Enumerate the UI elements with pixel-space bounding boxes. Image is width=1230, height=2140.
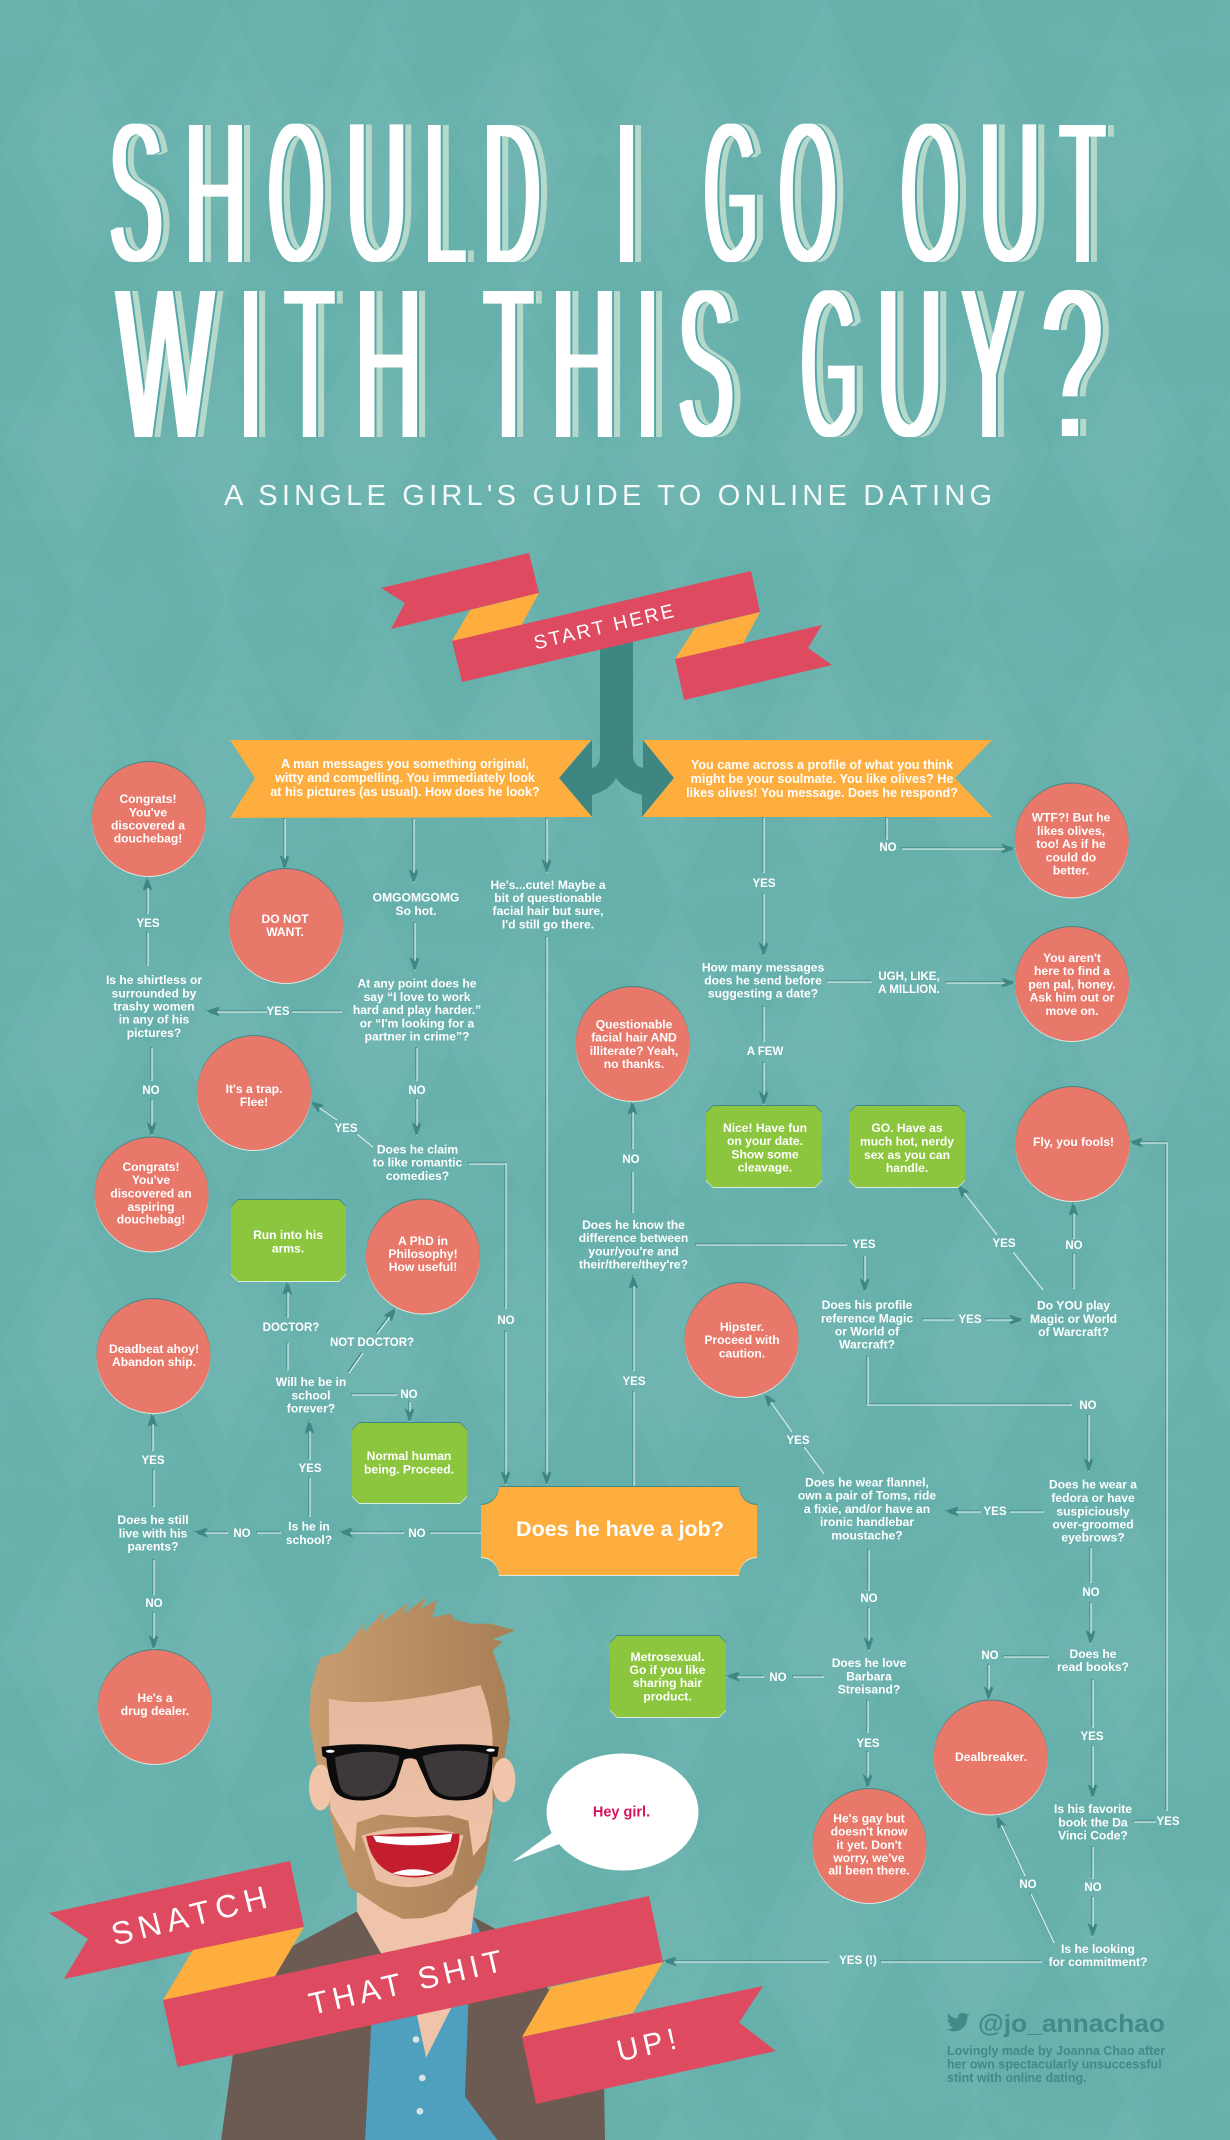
- arrow: da vinci no: [1092, 1847, 1094, 1937]
- arrow: magic no: [868, 1357, 1089, 1472]
- outcome: it's a trap: [197, 1036, 311, 1150]
- outcome: pen pal: pen pal, honey.: [1028, 978, 1116, 992]
- outcome: aspiring douchebag: aspiring: [127, 1200, 175, 1214]
- question: fedora: over-groomed: [1052, 1518, 1134, 1532]
- outcome: deadbeat: Deadbeat ahoy!: [109, 1342, 199, 1356]
- outcome: phd: How useful!: [389, 1260, 457, 1274]
- question: live with parents: live with his: [119, 1526, 188, 1540]
- flow labels: YES: [136, 918, 160, 930]
- title: W: [117, 243, 214, 486]
- outcome: aspiring douchebag: Congrats!: [122, 1160, 180, 1174]
- question: magic or warcraft: Does his profile: [822, 1298, 913, 1312]
- question: shirtless: in any of his: [119, 1012, 190, 1026]
- outcome: douchebag: douchebag!: [114, 832, 182, 846]
- arrow: da vinci yes: [1130, 1143, 1167, 1822]
- outcome: gay: it yet. Don't: [836, 1838, 902, 1852]
- banner: snatch that shit up: [49, 1861, 776, 2104]
- flow labels: YES: [334, 1123, 358, 1135]
- question: read books: Does he: [1069, 1647, 1117, 1661]
- outcome: douchebag: discovered a: [111, 818, 185, 832]
- outcome: do not want: DO NOT: [261, 912, 309, 926]
- subtitle: A SINGLE GIRL'S GUIDE TO ONLINE DATING: [224, 480, 992, 512]
- title: H: [356, 243, 422, 486]
- outcome: wtf: could do: [1046, 850, 1096, 864]
- question: flannel: moustache?: [831, 1528, 903, 1542]
- flow labels: YES: [1080, 1731, 1104, 1743]
- speech bubble: [512, 1754, 698, 1870]
- flow labels: NO: [1019, 1879, 1037, 1891]
- outcome: run into his arms: arms.: [272, 1242, 304, 1256]
- arrow: omg to at any point: [414, 923, 416, 971]
- question banner: soulmate profile: You came across a profile of what you think: [691, 758, 954, 772]
- credit note: stint with online dating.: [947, 2071, 1087, 2085]
- outcome: do not want: [229, 869, 343, 983]
- question: fedora: suspiciously: [1056, 1504, 1130, 1518]
- question box: does he have a job: [481, 1487, 757, 1575]
- title: H: [552, 243, 616, 486]
- flow labels: NO: [622, 1154, 640, 1166]
- question: live with parents: parents?: [127, 1540, 179, 1554]
- arrow: a million: [827, 982, 1015, 983]
- outcome: pen pal: Ask him out or: [1030, 990, 1115, 1004]
- outcome: fly you fools: [1016, 1087, 1130, 1201]
- outcome: nice, have fun: [706, 1106, 822, 1187]
- outcome: drug dealer: He's a: [137, 1691, 173, 1705]
- outcome: douchebag: You've: [129, 806, 167, 820]
- arrow: in school no: [195, 1532, 281, 1534]
- outcome: run into his arms: [231, 1200, 346, 1281]
- flow labels: YES: [852, 1239, 876, 1251]
- outcome: gay: [812, 1789, 926, 1903]
- flow labels: [136, 842, 1180, 1967]
- flow labels: YES: [958, 1314, 982, 1326]
- question: romantic comedies: Does he claim: [377, 1142, 458, 1156]
- question: he's cute: facial hair but sure,: [493, 904, 603, 918]
- outcome: metrosexual: Go if you like: [630, 1663, 706, 1677]
- question: do you play: of Warcraft?: [1038, 1325, 1109, 1339]
- flow labels: YES: [752, 878, 776, 890]
- title: I: [637, 241, 658, 486]
- title: T: [285, 242, 334, 486]
- outcome: it's a trap: Flee!: [240, 1095, 268, 1109]
- title: S: [678, 246, 733, 483]
- outcome: do not want: WANT.: [266, 925, 304, 939]
- question: he's cute: I'd still go there.: [502, 918, 594, 932]
- speech bubble: Hey girl.: [593, 1804, 650, 1820]
- title: I: [240, 241, 261, 486]
- outcome: fly you fools: Fly, you fools!: [1033, 1135, 1114, 1149]
- question: how many messages: does he send before: [704, 974, 822, 988]
- flow labels: NO: [769, 1672, 787, 1684]
- arrow: read books no: [989, 1657, 1049, 1700]
- outcome: aspiring douchebag: [94, 1138, 208, 1252]
- arrow: not doctor: [349, 1309, 396, 1373]
- question: in school: Is he in: [288, 1520, 330, 1534]
- outcome: hipster: Proceed with: [704, 1333, 780, 1347]
- question: romantic comedies: comedies?: [386, 1169, 449, 1183]
- flow labels: NO: [981, 1650, 999, 1662]
- arrow: flannel yes: [765, 1394, 824, 1474]
- outcome: metrosexual: product.: [643, 1690, 692, 1704]
- title: O: [780, 80, 836, 305]
- flow labels: DOCTOR?: [263, 1322, 319, 1334]
- arrow: grammar yes: [696, 1245, 865, 1292]
- question: magic or warcraft: Warcraft?: [839, 1338, 895, 1352]
- question banner: man messages you: at his pictures (as usual). How does he look?: [270, 785, 540, 799]
- flowchart connectors: [148, 818, 1167, 1962]
- flow labels: YES: [266, 1006, 290, 1018]
- flow labels: YES: [856, 1738, 880, 1750]
- arrow: at any point yes: [207, 1011, 342, 1013]
- question: do you play: Do YOU play: [1037, 1298, 1110, 1312]
- title: O: [902, 81, 959, 306]
- arrow: doctor: [287, 1282, 289, 1370]
- flow labels: YES: [622, 1376, 646, 1388]
- question: at any point: or “I'm looking for a: [360, 1016, 474, 1030]
- arrow: split from start banner: [559, 630, 674, 817]
- question: fedora: Does he wear a: [1049, 1478, 1137, 1492]
- arrow: he's cute to job: [546, 937, 548, 1485]
- question: streisand: Barbara: [846, 1670, 892, 1684]
- arrow: do you play yes: [958, 1185, 1043, 1290]
- flow labels: NO: [408, 1085, 426, 1097]
- question box: does he have a job: Does he have a job?: [516, 1517, 724, 1541]
- outcome: it's a trap: It's a trap.: [226, 1082, 282, 1096]
- question: school forever: Will he be in: [276, 1375, 346, 1389]
- question: fedora: eyebrows?: [1061, 1530, 1125, 1544]
- outcome: phd: [366, 1200, 480, 1314]
- arrow: in school yes: [309, 1421, 311, 1517]
- question: fedora: fedora or have: [1051, 1491, 1135, 1505]
- outcome: go: GO. Have as: [871, 1121, 943, 1135]
- jacket: [221, 1911, 605, 2140]
- flow labels: YES: [1156, 1816, 1180, 1828]
- flow labels: YES: [141, 1455, 165, 1467]
- outcome: metrosexual: [610, 1636, 726, 1717]
- neck: [357, 1886, 478, 2058]
- outcome: normal human being: being. Proceed.: [364, 1462, 454, 1476]
- question: he's cute: He's...cute! Maybe a: [490, 878, 606, 892]
- title: U: [980, 79, 1040, 305]
- outcome: douchebag: [92, 762, 206, 876]
- banner: start here: START HERE: [532, 600, 678, 654]
- question: commitment: Is he looking: [1061, 1942, 1135, 1956]
- arrow: read books yes: [1092, 1680, 1094, 1798]
- outcome: dealbreaker: [934, 1700, 1048, 1814]
- flow labels: A MILLION.: [878, 984, 940, 996]
- credit: [947, 2010, 1165, 2085]
- outcome: aspiring douchebag: discovered an: [110, 1186, 192, 1200]
- outcome: phd: A PhD in: [398, 1234, 448, 1248]
- outcome: wtf: better.: [1053, 864, 1089, 878]
- outcome: deadbeat: [96, 1299, 210, 1413]
- question: shirtless: surrounded by: [112, 986, 197, 1000]
- flow labels: YES: [983, 1506, 1007, 1518]
- title: ?: [1042, 245, 1102, 485]
- arrow: shirtless yes: [147, 878, 149, 966]
- question banner: soulmate profile: might be your soulmate. You like olives? He: [691, 772, 953, 786]
- title: L: [425, 79, 465, 308]
- flow labels: YES (!): [839, 1955, 877, 1967]
- outcome: metrosexual: Metrosexual.: [631, 1650, 704, 1664]
- arrow: streisand no: [727, 1676, 824, 1678]
- outcome: go: sex as you can: [864, 1148, 950, 1162]
- title: U: [347, 79, 407, 305]
- flow labels: NOT DOCTOR?: [330, 1337, 414, 1349]
- outcome: drug dealer: [98, 1650, 212, 1764]
- arrow: profile yes: [763, 818, 765, 956]
- arrow: commitment no: [997, 1816, 1054, 1943]
- flow labels: YES: [298, 1463, 322, 1475]
- title: O: [269, 81, 324, 305]
- twitter handle: @jo_annachao: [978, 2010, 1165, 2038]
- question: do you play: Magic or World: [1030, 1312, 1117, 1326]
- outcome: wtf: too! As if he: [1036, 837, 1106, 851]
- outcome: questionable facial hair: [576, 987, 690, 1101]
- question banner: soulmate profile: likes olives! You message. Does he respond?: [686, 786, 958, 800]
- question: da vinci code: Is his favorite: [1054, 1802, 1132, 1816]
- outcome: go: [849, 1106, 965, 1187]
- hair: [309, 1596, 515, 1815]
- outcome: run into his arms: Run into his: [253, 1228, 323, 1242]
- title: [110, 78, 1105, 486]
- flow labels: NO: [1084, 1882, 1102, 1894]
- arrow: fedora yes: [946, 1511, 1044, 1513]
- question: at any point: At any point does he: [358, 976, 477, 990]
- banner: start here: [381, 553, 832, 700]
- outcome: gay: all been there.: [828, 1864, 910, 1878]
- banner: snatch that shit up: SNATCH: [108, 1878, 276, 1952]
- outcome: pen pal: You aren't: [1043, 951, 1101, 965]
- upper teeth: [373, 1834, 452, 1845]
- outcome: questionable facial hair: Questionable: [596, 1018, 673, 1032]
- question banner: soulmate profile: [642, 740, 992, 817]
- icon: twitter bird: [947, 2013, 970, 2031]
- outcome: questionable facial hair: illiterate? Yeah,: [590, 1044, 678, 1058]
- title: T: [484, 242, 533, 486]
- arrow: do you play no: [1073, 1203, 1075, 1289]
- chin skin: [362, 1827, 464, 1887]
- outcome: drug dealer: drug dealer.: [121, 1704, 189, 1718]
- question banner: man messages you: A man messages you something original,: [281, 757, 529, 771]
- sunglasses: [321, 1744, 499, 1801]
- flow labels: NO: [408, 1528, 426, 1540]
- arrow: rom-coms no to job: [469, 1164, 506, 1485]
- flow labels: NO: [145, 1598, 163, 1610]
- banner: snatch that shit up: UP!: [614, 2022, 684, 2068]
- arrow: banner to do not want: [284, 819, 286, 869]
- title: I: [616, 78, 637, 308]
- question: live with parents: Does he still: [117, 1513, 189, 1527]
- question: he's cute: bit of questionable: [494, 891, 602, 905]
- arrow: shirtless no: [151, 1048, 153, 1136]
- credit note: Lovingly made by Joanna Chao after: [947, 2044, 1165, 2058]
- arrow: live with parents no: [153, 1560, 155, 1649]
- character: hipster guy: [221, 1596, 605, 2140]
- question banner: man messages you: witty and compelling. You immediately look: [274, 771, 536, 785]
- flow labels: NO: [142, 1085, 160, 1097]
- flow labels: YES: [786, 1435, 810, 1447]
- outcome: normal human being: [352, 1423, 467, 1503]
- flow labels: NO: [860, 1593, 878, 1605]
- outcome: pen pal: [1015, 927, 1129, 1041]
- flow labels: YES: [992, 1238, 1016, 1250]
- outcome: gay: He's gay but: [833, 1812, 905, 1826]
- outcome: pen pal: here to find a: [1034, 964, 1110, 978]
- question: school forever: forever?: [287, 1402, 335, 1416]
- outcome: aspiring douchebag: douchebag!: [117, 1212, 185, 1226]
- outcome: normal human being: Normal human: [367, 1449, 451, 1463]
- arrow: a few: [763, 1007, 765, 1105]
- question: your you're: difference between: [579, 1231, 688, 1245]
- arrow: live with parents yes: [153, 1414, 154, 1507]
- outcome: hipster: caution.: [719, 1346, 765, 1360]
- outcome: hipster: Hipster.: [720, 1320, 764, 1334]
- shirt buttons: [413, 2036, 426, 2115]
- question: your you're: Does he know the: [582, 1218, 685, 1232]
- outcome: wtf: likes olives,: [1037, 824, 1105, 838]
- title: U: [877, 243, 942, 483]
- question: in school: school?: [286, 1533, 332, 1547]
- beard: [329, 1808, 493, 1919]
- title: G: [801, 244, 857, 483]
- mouth: [366, 1833, 460, 1877]
- outcome: gay: worry, we've: [832, 1851, 905, 1865]
- flow labels: UGH, LIKE,: [878, 971, 940, 983]
- arrow: flannel no: [868, 1550, 870, 1651]
- outcome: douchebag: Congrats!: [119, 792, 177, 806]
- question: flannel: ironic handlebar: [820, 1515, 914, 1529]
- outcome: nice, have fun: cleavage.: [738, 1160, 792, 1174]
- question: at any point: hard and play harder.”: [353, 1003, 481, 1017]
- arrow: banner to he's cute: [546, 819, 548, 873]
- question: da vinci code: book the Da: [1058, 1816, 1128, 1830]
- outcome: metrosexual: sharing hair: [633, 1676, 702, 1690]
- title: D: [484, 79, 540, 308]
- arrow: banner to omgomgomg: [413, 819, 415, 883]
- question: flannel: Does he wear flannel,: [805, 1476, 929, 1490]
- question: shirtless: Is he shirtless or: [106, 973, 202, 987]
- arrow: at any point no: [416, 1048, 418, 1136]
- outcome: questionable facial hair: no thanks.: [604, 1057, 664, 1071]
- question: magic or warcraft: reference Magic: [821, 1312, 913, 1326]
- outcome: wtf: [1015, 784, 1129, 898]
- arrow: school forever no: [352, 1395, 410, 1422]
- outcome: dealbreaker: Dealbreaker.: [955, 1750, 1027, 1764]
- outcome: nice, have fun: on your date.: [727, 1134, 803, 1148]
- question: romantic comedies: to like romantic: [373, 1156, 462, 1170]
- shirt: [365, 1917, 497, 2140]
- question: omgomgomg: So hot.: [396, 904, 436, 918]
- outcome: nice, have fun: Nice! Have fun: [723, 1121, 807, 1135]
- question: at any point: partner in crime”?: [365, 1030, 469, 1044]
- outcome: gay: doesn't know: [831, 1824, 908, 1838]
- title: T: [1061, 79, 1105, 308]
- question: how many messages: suggesting a date?: [708, 986, 818, 1000]
- flow labels: NO: [1079, 1400, 1097, 1412]
- outcome: aspiring douchebag: You've: [132, 1173, 170, 1187]
- outcome: wtf: WTF?! But he: [1032, 810, 1111, 824]
- outcome: hipster: [684, 1283, 798, 1397]
- flow labels: A FEW: [747, 1046, 783, 1058]
- question: your you're: your/you're and: [588, 1244, 679, 1258]
- left ear: [309, 1765, 332, 1810]
- outcome: phd: Philosophy!: [388, 1247, 458, 1261]
- outcome: go: handle.: [886, 1161, 928, 1175]
- question: flannel: a fixie, and/or have an: [804, 1502, 930, 1516]
- title: Y: [961, 242, 1017, 485]
- flow labels: NO: [1065, 1240, 1083, 1252]
- question: streisand: Does he love: [832, 1656, 907, 1670]
- question: omgomgomg: OMGOMGOMG: [373, 890, 459, 904]
- title: H: [185, 80, 246, 308]
- arrow: job no: [340, 1532, 481, 1534]
- arrow: magic yes: [923, 1319, 1023, 1321]
- arrow: fedora no: [1090, 1548, 1092, 1644]
- flow labels: NO: [879, 842, 897, 854]
- arrow: job yes: [633, 1276, 635, 1487]
- question: read books: read books?: [1057, 1660, 1129, 1674]
- flow labels: NO: [233, 1528, 251, 1540]
- question: streisand: Streisand?: [838, 1682, 900, 1696]
- right ear: [492, 1758, 515, 1802]
- question: commitment: for commitment?: [1049, 1955, 1147, 1969]
- outcome: nice, have fun: Show some: [731, 1148, 799, 1162]
- question: shirtless: pictures?: [127, 1026, 181, 1040]
- outcome: deadbeat: Abandon ship.: [112, 1355, 196, 1369]
- question: school forever: school: [292, 1388, 330, 1402]
- outcome: questionable facial hair: facial hair AND: [591, 1030, 677, 1044]
- outcome: pen pal: move on.: [1045, 1004, 1099, 1018]
- question: how many messages: How many messages: [702, 960, 824, 974]
- arrow: rom-coms yes: [311, 1102, 373, 1147]
- question: shirtless: trashy women: [113, 1000, 195, 1014]
- banner: snatch that shit up: THAT SHIT: [305, 1942, 511, 2022]
- question: at any point: say “I love to work: [364, 990, 471, 1004]
- flow labels: NO: [1082, 1587, 1100, 1599]
- flow labels: NO: [400, 1389, 418, 1401]
- question banner: man messages you: [230, 740, 592, 818]
- outcome: go: much hot, nerdy: [860, 1134, 954, 1148]
- flow labels: NO: [497, 1315, 515, 1327]
- question: da vinci code: Vinci Code?: [1058, 1828, 1128, 1842]
- question: your you're: their/there/they're?: [579, 1258, 688, 1272]
- title: G: [705, 80, 757, 305]
- arrow: streisand yes: [867, 1701, 869, 1788]
- arrow: grammar no: [632, 1102, 634, 1213]
- arrow: profile no: [887, 818, 1015, 849]
- question: flannel: own a pair of Toms, ride: [798, 1488, 936, 1502]
- credit note: her own spectacularly unsuccessful: [947, 2058, 1162, 2072]
- lower teeth: [392, 1869, 435, 1876]
- question: magic or warcraft: or World of: [835, 1324, 900, 1338]
- title: S: [110, 82, 162, 305]
- face: [329, 1685, 493, 1891]
- arrow: commitment yes: [664, 1961, 1042, 1963]
